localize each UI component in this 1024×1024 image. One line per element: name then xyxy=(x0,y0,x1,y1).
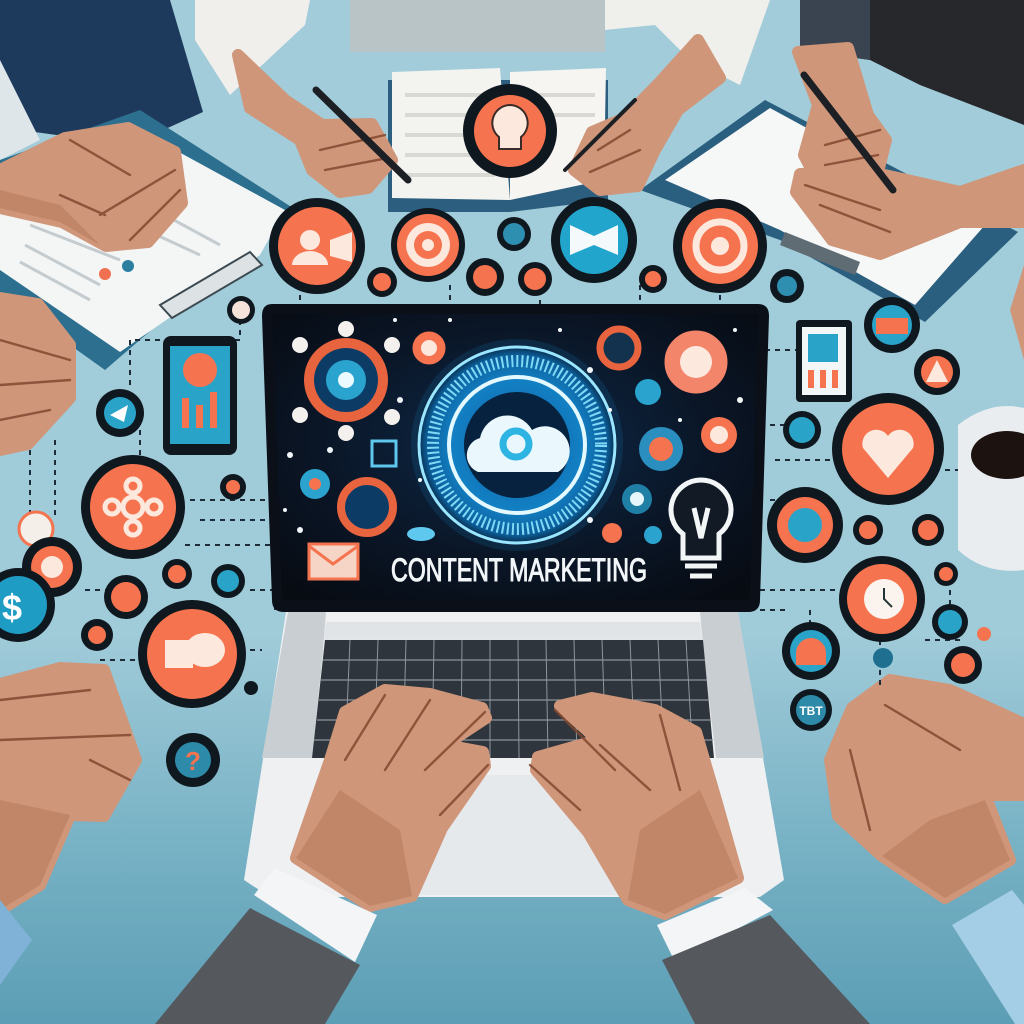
connector lines xyxy=(30,285,1000,690)
keyboard xyxy=(312,640,714,758)
icon: wheel badge xyxy=(673,199,767,293)
screen gears xyxy=(292,321,737,544)
icon: small blue badge xyxy=(783,411,821,449)
hands: left edge xyxy=(0,298,70,450)
icon: lightbulb badge xyxy=(463,84,557,178)
document: left clipboard xyxy=(0,110,293,370)
icon: TBT badge xyxy=(790,689,832,731)
laptop xyxy=(244,304,784,897)
hands: top right lower xyxy=(796,170,1024,254)
icon: video badge xyxy=(269,198,365,294)
documents on table xyxy=(0,68,1018,370)
hands on keyboard xyxy=(296,690,738,914)
right icons xyxy=(767,297,991,731)
icon row top xyxy=(227,84,804,324)
laptop base xyxy=(244,612,784,897)
hands: bottom left xyxy=(0,668,136,910)
document: open book xyxy=(388,68,608,212)
hands: top right upper xyxy=(798,48,886,190)
icon: gear badge xyxy=(767,487,843,563)
document: right clipboard xyxy=(640,100,1018,322)
pens xyxy=(316,75,893,190)
icon: network badge xyxy=(81,455,185,559)
sleeves and suit xyxy=(0,868,1024,1024)
icon: heart badge xyxy=(832,393,944,505)
icon: blue bow badge xyxy=(551,197,637,283)
left suit sleeve xyxy=(155,908,360,1024)
icon: question badge xyxy=(166,733,220,787)
hands: top center right xyxy=(574,40,720,190)
icon: small badges xyxy=(227,217,804,324)
icon: blue small badge xyxy=(96,389,144,437)
icon: TBT badge: TBT xyxy=(799,704,823,718)
hands: top left person xyxy=(0,128,182,246)
icon: coffee mug xyxy=(958,406,1024,571)
icon: phone chart xyxy=(163,336,237,455)
right shirt corner xyxy=(952,890,1024,1024)
icon: building badge xyxy=(864,297,920,353)
icon: triangle badge xyxy=(914,349,960,395)
icon: small left cluster xyxy=(19,474,258,695)
icon: envelope xyxy=(309,544,358,579)
icon: target badge xyxy=(391,208,465,282)
right hand xyxy=(530,698,738,914)
right suit sleeve xyxy=(662,915,870,1024)
left shirt corner xyxy=(0,900,32,985)
hands: right edge xyxy=(1010,265,1024,360)
people at top: clothing xyxy=(0,0,1024,160)
stars xyxy=(283,318,743,533)
heading: content marketing: CONTENT MARKETING xyxy=(391,552,647,588)
icon: clock badge xyxy=(839,556,925,642)
left icons xyxy=(0,336,258,787)
icon: person badge xyxy=(782,622,840,680)
icon: screen lightbulb xyxy=(671,480,731,576)
left cuff xyxy=(254,868,377,962)
trackpad xyxy=(420,775,630,895)
laptop screen xyxy=(262,304,769,612)
icon: dollar badge xyxy=(0,568,55,642)
left hand xyxy=(296,690,488,906)
icon: dollar badge: $ xyxy=(2,587,22,628)
icon: speech badge xyxy=(138,600,246,708)
hands: top center left xyxy=(238,55,392,192)
icon: tablet chart xyxy=(796,320,852,402)
hands: bottom right xyxy=(830,680,1024,898)
central glow xyxy=(411,339,623,551)
right cuff xyxy=(657,888,773,962)
icon: small right cluster xyxy=(853,514,991,684)
icon: question badge: ? xyxy=(185,746,201,776)
